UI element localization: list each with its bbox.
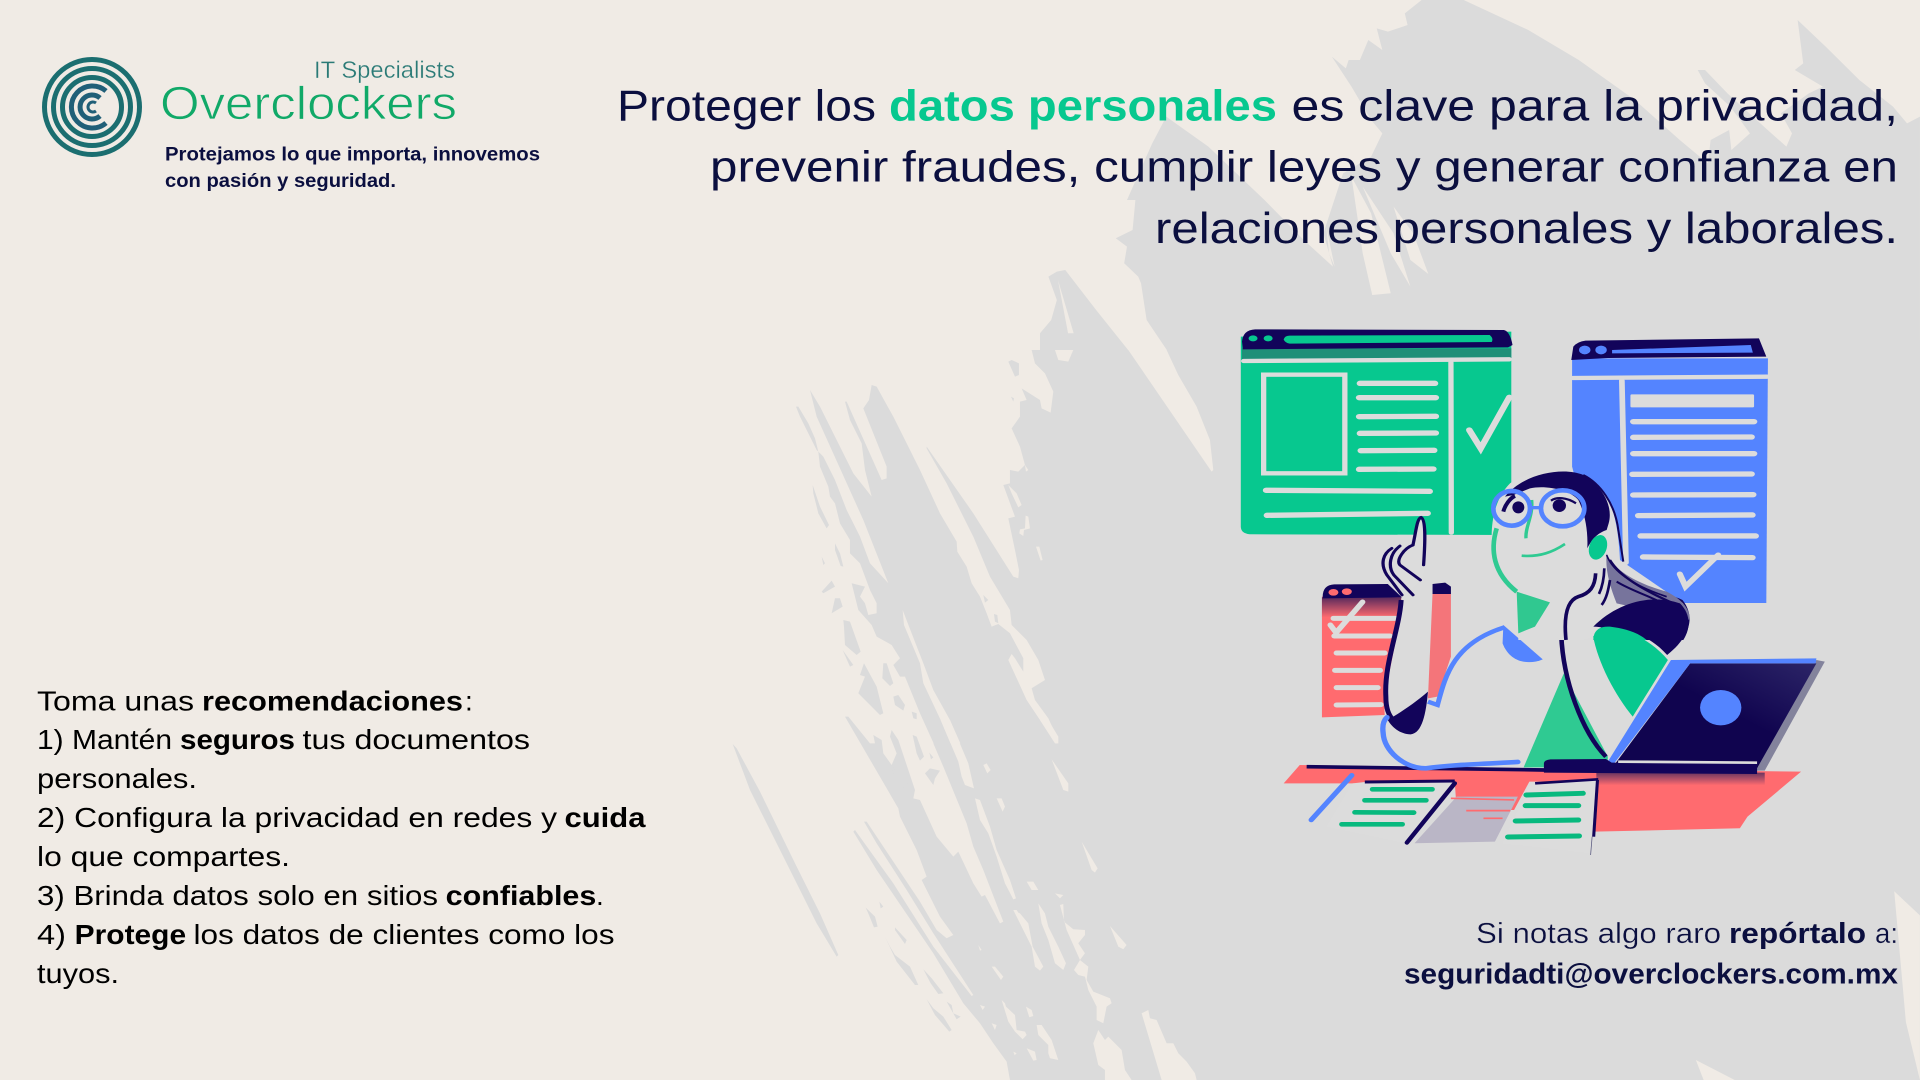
recommendations text: Protege xyxy=(75,919,186,950)
recommendations text: personales. xyxy=(37,763,197,794)
title: Proteger los xyxy=(617,82,876,130)
report contact text: repórtalo xyxy=(1729,918,1866,950)
recommendations text: los datos de clientes como los xyxy=(194,919,614,950)
illustration: blue browser window xyxy=(1571,338,1768,603)
report contact text: seguridadti@overclockers.com.mx xyxy=(1404,958,1898,990)
recommendations text: 3) Brinda datos solo en sitios xyxy=(37,880,438,911)
illustration: desk and papers xyxy=(1284,765,1801,855)
logo: tagline: Protejamos lo que importa, innovemos xyxy=(165,144,540,166)
title: prevenir fraudes, cumplir leyes y generar confianza en xyxy=(710,142,1898,192)
illustration: right paper xyxy=(1503,779,1598,855)
illustration: pink browser window xyxy=(1322,583,1451,717)
illustration: pointing hand xyxy=(1382,517,1425,597)
recommendations text: . xyxy=(596,880,604,911)
recommendations text: 4) xyxy=(37,919,66,950)
recommendations text: confiables xyxy=(446,880,596,911)
logo: IT Specialists: IT Specialists xyxy=(314,57,455,84)
recommendations text: cuida xyxy=(564,802,646,833)
brush stroke background xyxy=(733,0,1920,1080)
illustration: woman at desk with browser windows xyxy=(1241,329,1825,855)
report contact text xyxy=(1404,918,1898,990)
illustration: woman body xyxy=(1383,587,1690,768)
report contact text: a: xyxy=(1875,918,1898,950)
recommendations text: tuyos. xyxy=(37,958,119,989)
recommendations text: seguros xyxy=(180,724,295,755)
recommendations text: Toma unas xyxy=(37,686,194,717)
title xyxy=(617,82,1898,253)
recommendations text: recomendaciones xyxy=(202,686,463,717)
logo: tagline xyxy=(165,144,540,192)
title: relaciones personales y laborales. xyxy=(1155,204,1898,253)
recommendations text: 1) Mantén xyxy=(37,724,172,755)
title: datos personales xyxy=(889,82,1277,130)
illustration: pen xyxy=(1311,775,1352,820)
illustration: laptop xyxy=(1544,658,1825,774)
logo: tagline: con pasión y seguridad. xyxy=(165,170,396,192)
title: es clave para la privacidad, xyxy=(1292,82,1898,130)
illustration: woman head and hair xyxy=(1491,472,1690,640)
logo: concentric circle mark xyxy=(44,60,140,154)
illustration: left paper xyxy=(1327,781,1455,843)
report contact text: Si notas algo raro xyxy=(1476,918,1721,950)
logo: Overclockers: Overclockers xyxy=(160,77,457,129)
recommendations text xyxy=(37,686,646,989)
recommendations text: 2) Configura la privacidad en redes y xyxy=(37,802,557,833)
illustration: green browser window xyxy=(1241,329,1513,535)
logo xyxy=(44,57,540,192)
recommendations text: tus documentos xyxy=(302,724,530,755)
recommendations text: lo que compartes. xyxy=(37,841,290,872)
recommendations text: : xyxy=(465,686,473,717)
